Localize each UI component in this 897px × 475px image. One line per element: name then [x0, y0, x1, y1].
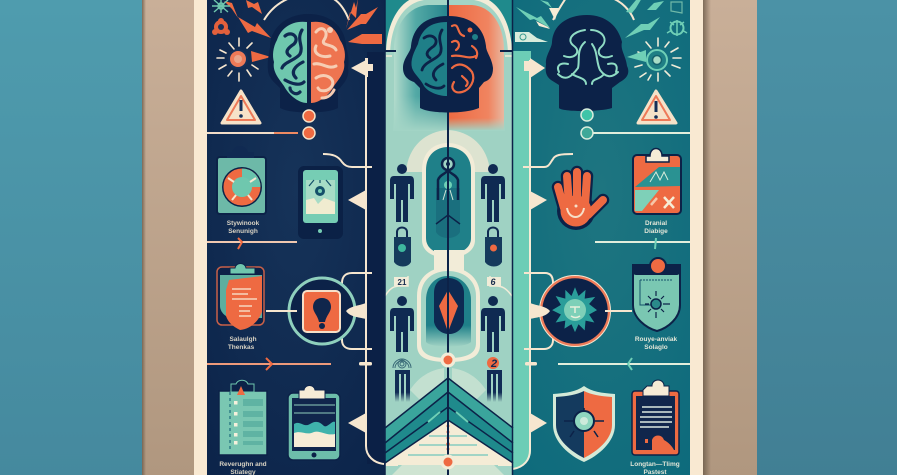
arc at top of right panel: [553, 0, 634, 20]
panel: center: [385, 0, 513, 475]
icon: hand: [557, 172, 603, 230]
label: checklist clipboard: Reverughn and: [219, 461, 267, 468]
icon: clipboard gauge: [217, 146, 266, 214]
label: shield clipboard: Solaglo: [644, 344, 668, 351]
divider line 3: [207, 358, 331, 370]
icon: phone: [298, 166, 343, 239]
number tag right: 6: [490, 277, 496, 287]
label: shield clipboard: [635, 336, 678, 351]
number tag right: [487, 277, 501, 287]
right rail arrows: [523, 58, 573, 433]
label: clipboard chart: Dranial: [645, 220, 667, 227]
icon: sun face circle: [540, 276, 632, 346]
icon: shield clipboard: [633, 258, 680, 331]
center connector dot: [440, 352, 456, 368]
tan frame right: [703, 0, 757, 475]
outlined bracket shapes near people: [385, 276, 512, 296]
icon: report clipboard right: [632, 380, 679, 455]
cream poster border: [194, 0, 703, 475]
panel: left navy: [207, 0, 385, 475]
person: top right: [481, 164, 505, 222]
label: clipboard gauge: Stywinook: [227, 220, 260, 227]
icon: tablet chart: [288, 386, 340, 460]
left vertical rail with arrows: [323, 58, 384, 464]
label: shield clipboard: Rouye-anviak: [635, 336, 678, 343]
icon: small teal bug: [667, 20, 687, 36]
icon: lightning bolts left: [224, 0, 382, 44]
side hills: [410, 368, 486, 400]
top arch: [385, 0, 513, 131]
arrow: right rail middle: [530, 303, 550, 319]
icon: clipboard chart: [633, 148, 681, 214]
label: report clipboard right: Longtan—Tlimg: [630, 461, 680, 468]
label: clipboard gauge: Senunigh: [228, 228, 258, 235]
label: report clipboard right: [630, 461, 680, 475]
tan frame left: [142, 0, 195, 475]
label: clipboard report: Thenkas: [228, 344, 255, 351]
center spine line: [447, 0, 449, 475]
icon: left warning triangle: [222, 91, 260, 123]
person: middle right: [481, 296, 505, 352]
divider lines right: [558, 133, 690, 370]
divider line 1: [207, 132, 298, 134]
center cream halo: [406, 130, 490, 172]
icon: alert circle: [266, 278, 355, 344]
icon: left brain: [268, 14, 349, 112]
connector dots left: [303, 110, 315, 139]
icon: shield: [553, 386, 615, 462]
chevrons: [385, 378, 513, 475]
divider line 2: [207, 238, 297, 249]
icon: checklist clipboard: [219, 380, 267, 455]
icon: lightning bolts right: [516, 0, 664, 38]
icon: lock right: [485, 228, 502, 266]
icon: small doc: [671, 2, 682, 13]
icon: clipboard report: [217, 264, 264, 330]
icon: right brain: [546, 15, 628, 111]
person: lower right with badge: 2: [490, 358, 497, 370]
person: top left: [390, 164, 414, 222]
label: clipboard chart: Diabige: [644, 228, 668, 235]
number tag left: [394, 277, 408, 287]
icon: small teal burst: [212, 0, 230, 13]
icon: bug: [212, 18, 230, 35]
background wall right: [757, 0, 897, 475]
icon: right sun: [627, 38, 681, 81]
label: clipboard report: Salaulgh: [229, 336, 257, 343]
person: middle left: [390, 296, 414, 352]
label: clipboard chart: [644, 220, 668, 235]
arc at top of left panel: [264, 0, 349, 20]
icon: left sun: [217, 38, 271, 81]
icon: tag right: [515, 32, 548, 42]
capsule neck: [434, 250, 464, 272]
icon: central head brain: [403, 16, 493, 112]
capsule 2: [417, 267, 480, 362]
number tag left: 21: [398, 278, 407, 287]
label: clipboard gauge: [227, 220, 260, 235]
bottom connector dot: [440, 454, 456, 470]
person: lower right with badge: [487, 357, 502, 402]
background wall left: [0, 0, 142, 475]
label: checklist clipboard: [219, 461, 267, 475]
panel: right teal: [513, 0, 690, 475]
label: clipboard report: [228, 336, 257, 351]
person: lower left with fingerprint: [393, 359, 411, 402]
connector dots right: [581, 109, 593, 139]
icon: lock left: [394, 228, 411, 266]
icon: right warning triangle: [638, 91, 676, 123]
capsule 1: [422, 143, 475, 258]
arrow: left rail middle: [346, 303, 366, 319]
